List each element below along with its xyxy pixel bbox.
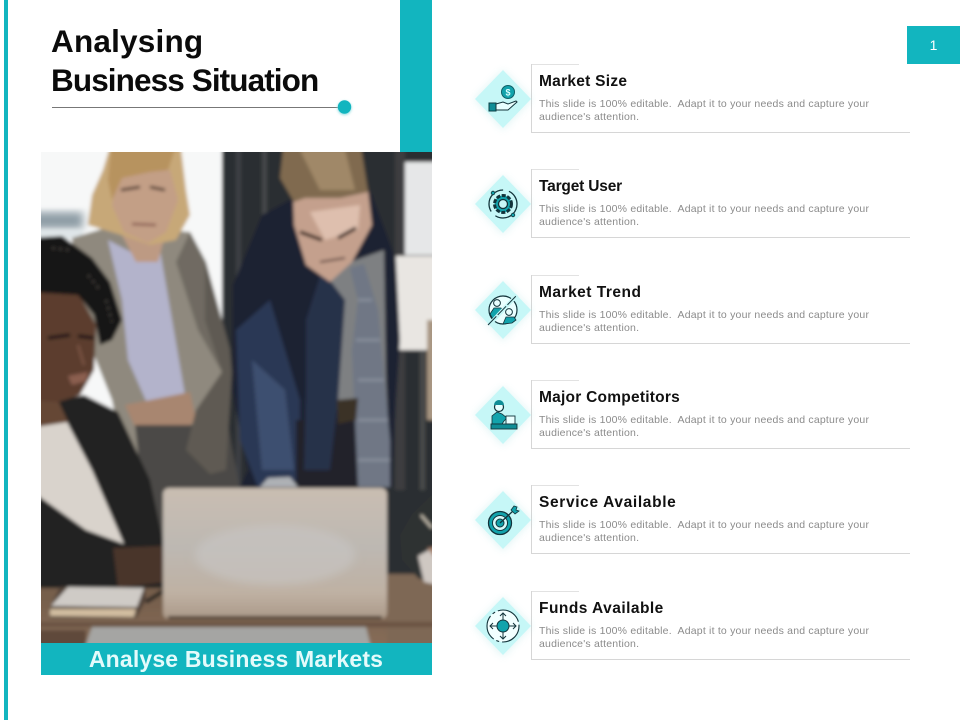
page number tab: 1: [930, 37, 937, 53]
description: This slide is 100% editable. Adapt it to your needs and capture your audience's attention.: [539, 203, 869, 228]
table: [30, 575, 450, 655]
blazer sleeve overlap: [186, 262, 232, 474]
page number tab: [907, 26, 960, 64]
icon: dashed circle with four arrows: [474, 597, 531, 656]
heading: Funds Available: Funds Available: [539, 600, 664, 617]
hand on laptop: [260, 477, 298, 487]
dark room right: [222, 140, 452, 660]
icon: hand holding dollar coin: [474, 70, 531, 130]
front woman: [30, 395, 165, 590]
icon: target with arrow: [474, 491, 531, 550]
icon: hand holding dollar coin: $: [505, 88, 511, 98]
photo caption banner: Analyse Business Markets: [89, 646, 383, 672]
title: Analysing: [51, 23, 203, 59]
title: Business Situation: [51, 62, 318, 98]
description: This slide is 100% editable. Adapt it to your needs and capture your audience's attention.: [539, 625, 869, 650]
icon: two people split by a diagonal: [474, 281, 531, 340]
item: Market Size: [474, 64, 910, 133]
item: Market Trend: [474, 275, 910, 344]
title underline with dot: [52, 100, 353, 116]
heading: Service Available: Service Available: [539, 494, 676, 511]
heading: Major Competitors: Major Competitors: [539, 389, 680, 406]
photo caption banner: [41, 643, 432, 675]
left accent bar: [4, 0, 8, 720]
lower blazer in shadow: [135, 425, 240, 560]
teal accent block behind photo: [400, 0, 432, 153]
heading: Market Size: Market Size: [539, 73, 627, 90]
notebook: [49, 587, 146, 618]
item: Funds Available: [474, 591, 910, 660]
man in navy suit: [232, 190, 400, 487]
heading: Market Trend: Market Trend: [539, 284, 641, 301]
description: This slide is 100% editable. Adapt it to your needs and capture your audience's attention.: [539, 519, 869, 544]
laptop: [163, 488, 387, 619]
item: Service Available: [474, 485, 910, 554]
title: [51, 23, 318, 98]
icon: gear in orbit: [474, 175, 531, 234]
photo: business team around a laptop: [41, 152, 432, 643]
icon: worker at desk with box: [474, 386, 531, 446]
item: Major Competitors: [474, 380, 910, 449]
description: This slide is 100% editable. Adapt it to your needs and capture your audience's attention.: [539, 309, 869, 334]
description: This slide is 100% editable. Adapt it to your needs and capture your audience's attention.: [539, 414, 869, 439]
description: This slide is 100% editable. Adapt it to your needs and capture your audience's attention.: [539, 98, 869, 123]
item: Target User: [474, 169, 910, 238]
heading: Target User: Target User: [539, 178, 622, 195]
blonde woman: [72, 226, 230, 490]
right person: [400, 480, 447, 587]
